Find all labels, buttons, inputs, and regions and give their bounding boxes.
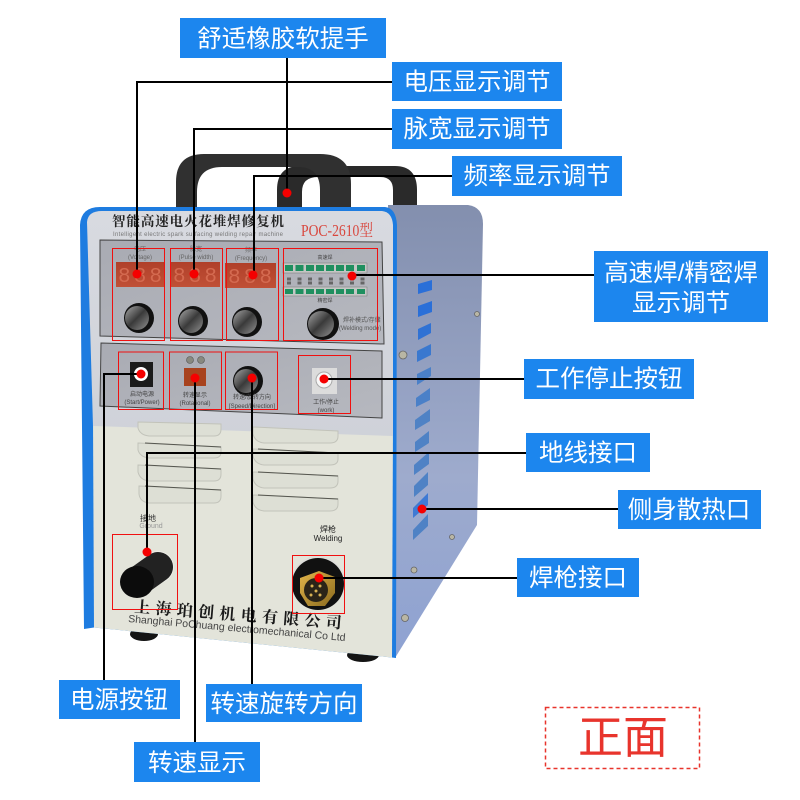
label: speed display — [134, 742, 260, 782]
label: ground port — [526, 433, 650, 472]
leader end dots — [132, 188, 426, 582]
lower control panel — [100, 343, 382, 418]
rear handle — [277, 166, 417, 207]
label: handle — [180, 18, 386, 58]
label: side cooling — [618, 490, 761, 529]
label: speed display: 转速显示 — [148, 749, 246, 777]
rubber feet — [130, 627, 379, 662]
rotation display: (Rotational) — [179, 401, 211, 407]
label: torch port: 焊枪接口 — [529, 564, 627, 592]
label: frequency — [452, 156, 622, 196]
rotation display: 转速显示 — [183, 391, 207, 399]
label: work stop — [524, 359, 694, 399]
ground caption — [139, 513, 163, 530]
blue frame — [80, 207, 397, 658]
side panel — [388, 205, 483, 658]
label: welding mode: 显示调节 — [632, 289, 730, 317]
label: rotation direction — [206, 684, 362, 722]
mode indicator rows — [283, 254, 367, 304]
display captions — [128, 245, 267, 262]
LED displays: 888 — [228, 267, 272, 290]
display captions: (Pulse width) — [179, 255, 213, 261]
power switch: (Start/Power) — [124, 400, 160, 406]
display captions: 电压 — [134, 245, 146, 253]
speed caption: [Speed/Direction] — [229, 404, 275, 410]
display captions: 频率 — [245, 246, 257, 254]
label: power button — [59, 680, 180, 719]
welding caption: Welding — [314, 534, 342, 543]
power switch — [124, 362, 160, 406]
label: welding mode: 高速焊/精密焊 — [604, 259, 758, 287]
speed caption: 转速/旋转方向 — [233, 393, 271, 401]
label: side cooling: 侧身散热口 — [628, 496, 750, 524]
display captions: (Frequency) — [235, 256, 267, 262]
LED displays: 888 — [118, 266, 162, 289]
rotation display — [179, 356, 211, 407]
label: work stop: 工作停止按钮 — [536, 365, 682, 393]
LED displays — [116, 262, 276, 290]
front upper fascia — [87, 211, 393, 436]
label: ground port: 地线接口 — [539, 439, 637, 467]
LED displays: 888 — [173, 266, 217, 289]
label: handle: 舒适橡胶软提手 — [197, 25, 369, 53]
welding caption — [314, 524, 342, 543]
model number: POC-2610型 — [301, 221, 373, 240]
company name: 上海珀创机电有限公司 — [134, 597, 343, 632]
label: frequency: 频率显示调节 — [464, 162, 610, 190]
label: voltage: 电压显示调节 — [404, 68, 550, 96]
welding connector — [291, 556, 345, 610]
label: power button: 电源按钮 — [70, 686, 168, 714]
mode indicator rows: 精密焊 — [317, 297, 333, 304]
label: pulse width — [392, 109, 562, 149]
welding caption: 焊枪 — [320, 524, 336, 534]
label: rotation direction: 转速旋转方向 — [210, 690, 358, 718]
mode indicator rows: 高速焊 — [317, 254, 333, 261]
label: pulse width: 脉宽显示调节 — [404, 115, 550, 143]
display captions: 脉宽 — [190, 245, 202, 253]
power switch: 启动电源 — [130, 390, 154, 398]
welding mode caption: 焊补模式/存储 — [343, 316, 381, 324]
leader lines — [104, 58, 618, 742]
work button: 工作/停止 — [313, 398, 339, 406]
work button — [312, 368, 339, 414]
front view tag: 正面 — [578, 712, 668, 763]
ground caption: 接地 — [140, 513, 156, 523]
display captions: (Voltage) — [128, 255, 152, 261]
front vents — [138, 422, 338, 511]
work button: (work) — [318, 408, 334, 414]
side screws — [399, 312, 480, 622]
welding repair machine — [80, 154, 483, 662]
ground connector — [120, 551, 174, 598]
welding mode caption: (Welding mode) — [339, 326, 381, 332]
company name english: Shanghai PoChuang electromechanical Co Ltd — [128, 613, 346, 644]
front handle — [176, 154, 351, 207]
label: welding mode — [594, 251, 768, 322]
front cream panel — [93, 420, 393, 658]
front view tag — [546, 708, 700, 768]
machine subtitle: Intelligent electric spark surfacing welding repair machine — [113, 232, 284, 238]
ground caption: Ground — [139, 523, 163, 530]
machine title: 智能高速电火花堆焊修复机 — [112, 213, 284, 229]
upper control panel — [100, 240, 384, 344]
knobs — [124, 303, 339, 396]
red highlight boxes — [112, 248, 378, 614]
label: voltage — [392, 62, 562, 101]
label: torch port — [517, 558, 639, 597]
side vents — [413, 280, 432, 540]
